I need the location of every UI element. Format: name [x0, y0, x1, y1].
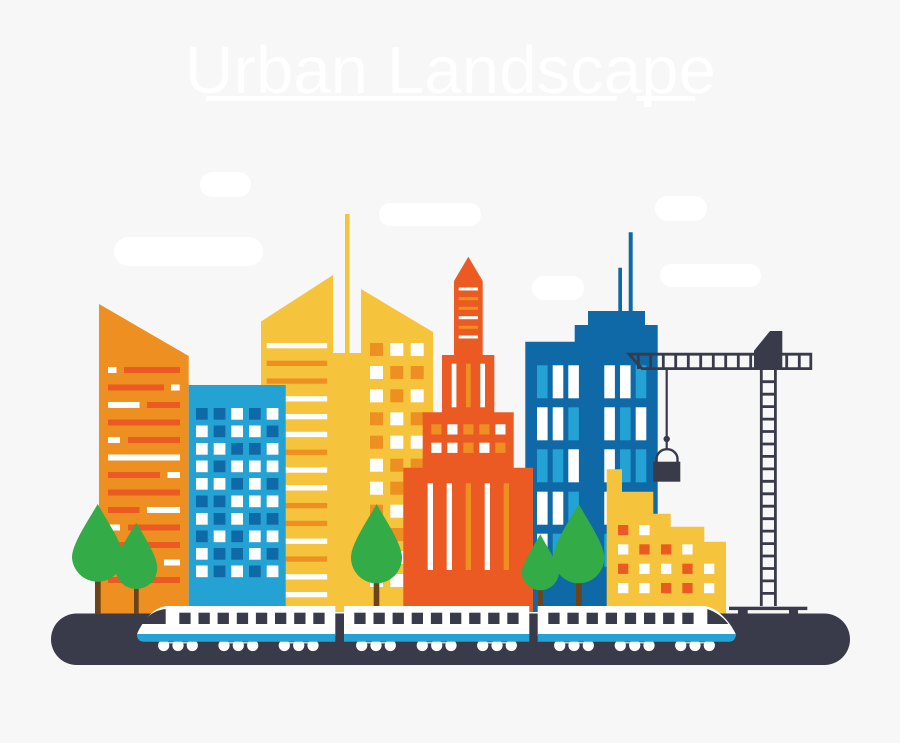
dark blue skyscraper windows: [537, 365, 646, 567]
building: small yellow stepped block: [607, 469, 726, 614]
yellow tower windows: [370, 343, 424, 587]
tree 4: [522, 534, 559, 607]
crane cab: [754, 331, 782, 370]
building: red stepped tower: [403, 257, 533, 612]
building: orange slanted tower: [99, 304, 189, 614]
crane mast: [760, 370, 777, 606]
tree 5: [553, 504, 604, 607]
train car 3: [538, 606, 736, 642]
train wheels: [158, 640, 715, 651]
red tower top stripes: [459, 288, 478, 338]
tree 1: [72, 504, 123, 614]
red tower second tier bars: [452, 364, 485, 407]
crane jib: [629, 354, 811, 369]
red tower base bars: [428, 483, 509, 570]
train car 2: [344, 606, 529, 642]
small block windows: [618, 525, 714, 593]
yellow tower stripes: [267, 343, 327, 597]
title: Urban Landscape: [185, 33, 716, 108]
clouds: [114, 172, 761, 300]
building: yellow twin tower: [261, 214, 433, 612]
crane hook and load: [653, 370, 680, 482]
building: light blue block: [189, 385, 286, 612]
orange tower stripes: [108, 367, 180, 583]
tree 3: [351, 504, 402, 607]
red tower third tier windows: [431, 424, 506, 453]
train: [137, 606, 736, 651]
light blue block windows: [196, 408, 278, 577]
building: dark blue skyscraper: [525, 232, 658, 612]
tree 2: [115, 523, 157, 614]
trees: [72, 504, 604, 614]
train car 1: [137, 606, 335, 642]
road: [51, 614, 850, 665]
construction crane: [629, 331, 811, 614]
crane base: [729, 607, 807, 614]
